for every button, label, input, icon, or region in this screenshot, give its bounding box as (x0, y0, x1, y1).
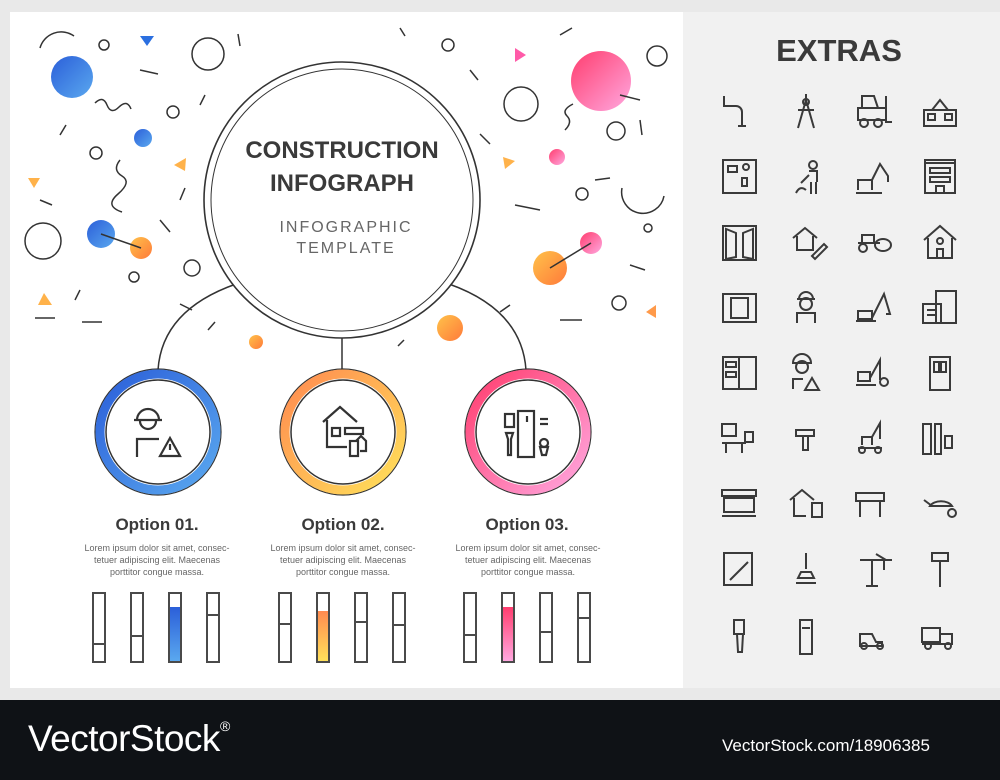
option circle 3 (465, 369, 591, 495)
option headings and text (115, 515, 569, 534)
text: tetuer adipiscing elit. Maecenas (465, 555, 592, 565)
icon: worker with warning (134, 409, 180, 457)
text: porttitor congue massa. (481, 567, 575, 577)
text: tetuer adipiscing elit. Maecenas (94, 555, 221, 565)
text: porttitor congue massa. (110, 567, 204, 577)
extras heading: EXTRAS (776, 33, 902, 68)
text: tetuer adipiscing elit. Maecenas (280, 555, 407, 565)
title: CONSTRUCTION (245, 137, 439, 164)
panel: main infographic (10, 12, 683, 688)
icon: bathroom (505, 411, 548, 457)
footer bar (0, 700, 1000, 780)
extras icon grid (722, 94, 956, 654)
connector lines (158, 284, 526, 370)
option headings and text: Option 03. (485, 515, 569, 534)
icon: house painting (323, 407, 366, 456)
option headings and text: Option 02. (301, 515, 385, 534)
main title circle: INFOGRAPH (270, 170, 414, 197)
footer logo: VectorStock® (28, 718, 230, 759)
main title circle (204, 62, 480, 338)
option circle 2 (280, 369, 406, 495)
text: Lorem ipsum dolor sit amet, consec- (84, 543, 230, 553)
subtitle: INFOGRAPHIC (279, 219, 413, 236)
option headings and text: Option 01. (115, 515, 199, 534)
text: Lorem ipsum dolor sit amet, consec- (270, 543, 416, 553)
footer url: VectorStock.com/18906385 (722, 736, 930, 755)
text: Lorem ipsum dolor sit amet, consec- (455, 543, 601, 553)
main title circle: TEMPLATE (296, 240, 396, 257)
panel: extras (683, 12, 1000, 688)
decorative confetti (25, 28, 667, 349)
option circle 1 (95, 369, 221, 495)
bar charts (93, 593, 590, 662)
text: porttitor congue massa. (296, 567, 390, 577)
